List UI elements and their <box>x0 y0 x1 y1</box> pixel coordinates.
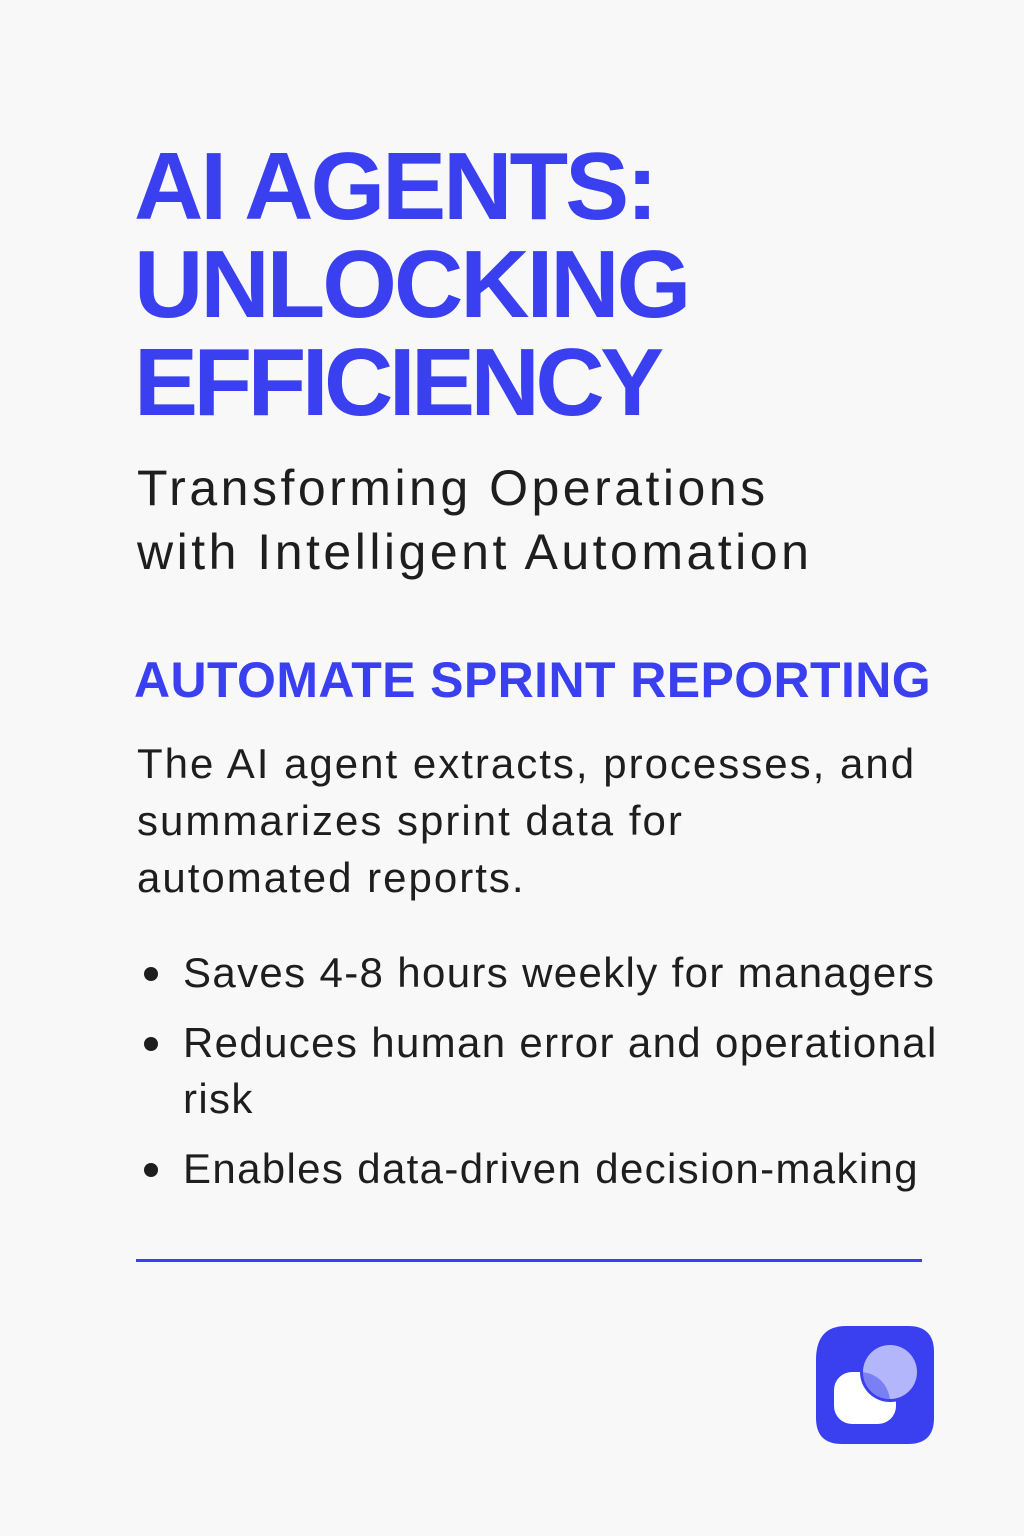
title: UNLOCKING <box>134 231 688 338</box>
description: automated reports. <box>137 854 526 901</box>
description: The AI agent extracts, processes, and <box>137 740 916 787</box>
description <box>137 740 916 901</box>
description: summarizes sprint data for <box>137 797 684 844</box>
title: EFFICIENCY <box>134 329 660 436</box>
title: AI AGENTS: <box>134 133 655 240</box>
icon: logo <box>816 1326 934 1444</box>
bullet: data-driven: Enables data-driven decision-making <box>183 1145 919 1192</box>
subtitle: with Intelligent Automation <box>137 524 812 580</box>
title <box>134 133 688 436</box>
bullet: reduces error: Reduces human error and operational <box>183 1019 938 1066</box>
subtitle: Transforming Operations <box>137 460 769 516</box>
bullet: reduces error: risk <box>183 1075 254 1122</box>
bullet list <box>144 949 938 1192</box>
bullet: reduces error <box>144 1019 938 1122</box>
subtitle <box>137 460 812 580</box>
section heading: AUTOMATE SPRINT REPORTING <box>134 652 931 708</box>
bullet: saves hours: Saves 4-8 hours weekly for managers <box>183 949 935 996</box>
